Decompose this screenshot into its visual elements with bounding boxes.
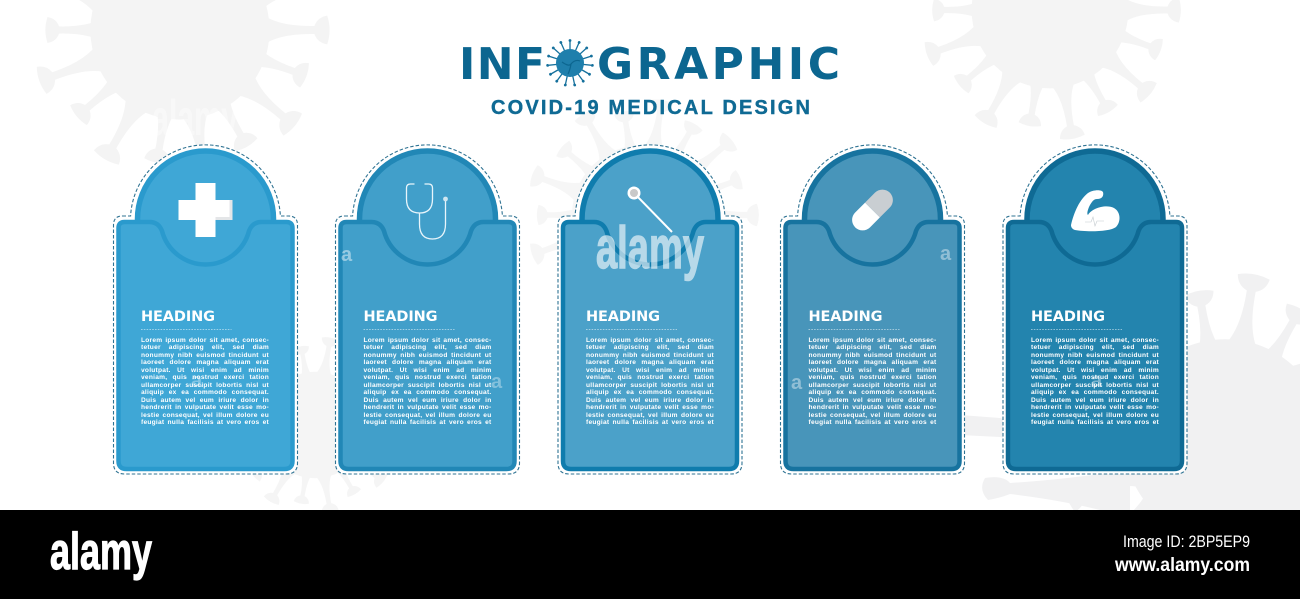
- body text: aliquip ex ea commodo consequat.: [141, 389, 269, 396]
- heading: HEADING: [808, 309, 882, 325]
- body text: nonummy nibh euismod tincidunt ut: [1031, 352, 1159, 358]
- body text: lestie consequat, vel illum dolore eu: [808, 412, 936, 418]
- dashed outline: [1003, 145, 1187, 474]
- body text: hendrerit in vulputate velit esse mo-: [808, 404, 936, 411]
- body text: laoreet dolore magna aliquam erat: [364, 359, 492, 366]
- background virus: bottom left: [228, 336, 404, 514]
- body text: [364, 336, 494, 428]
- card body: [1008, 222, 1182, 469]
- card body: [340, 222, 514, 469]
- arch: [804, 151, 940, 287]
- body text: volutpat. Ut wisi enim ad minim: [364, 366, 492, 374]
- footer logo: alamy: [50, 523, 152, 581]
- body text: nonummy nibh euismod tincidunt ut: [808, 352, 936, 358]
- dashed outline: [336, 145, 520, 474]
- heading: HEADING: [364, 309, 438, 325]
- footer bar: [0, 510, 1300, 599]
- body text: lestie consequat, vel illum dolore eu: [141, 412, 269, 418]
- body text: Duis autem vel eum iriure dolor in: [808, 396, 936, 404]
- panel: card 1: [114, 145, 298, 474]
- title text: INF: INF: [459, 39, 545, 90]
- body text: aliquip ex ea commodo consequat.: [586, 389, 714, 396]
- body text: feugiat nulla facilisis at vero eros et: [1031, 419, 1159, 426]
- body text: veniam, quis nostrud exerci tation: [141, 374, 269, 381]
- subtitle: COVID-19 MEDICAL DESIGN: [491, 97, 810, 119]
- panel: card 2: [336, 145, 520, 474]
- card body: [786, 222, 960, 469]
- body text: Duis autem vel eum iriure dolor in: [586, 396, 714, 404]
- body text: volutpat. Ut wisi enim ad minim: [1031, 366, 1159, 374]
- icon: stethoscope: [406, 184, 448, 239]
- body text: Duis autem vel eum iriure dolor in: [1031, 396, 1159, 404]
- icon: pill capsule: [848, 185, 897, 235]
- body text: volutpat. Ut wisi enim ad minim: [808, 366, 936, 374]
- body text: volutpat. Ut wisi enim ad minim: [141, 366, 269, 374]
- dashed outline: [780, 145, 964, 474]
- body text: laoreet dolore magna aliquam erat: [808, 359, 936, 366]
- body text: feugiat nulla facilisis at vero eros et: [586, 419, 714, 426]
- website: www.alamy.com: [1114, 555, 1250, 576]
- body text: aliquip ex ea commodo consequat.: [364, 389, 492, 396]
- body text: tetuer adipiscing elit, sed diam: [586, 344, 714, 351]
- background virus: top right: [922, 0, 1181, 142]
- background virus: top left: [33, 0, 330, 180]
- watermark fragments: a: [341, 244, 353, 266]
- body text: Lorem ipsum dolor sit amet, consec-: [141, 336, 269, 344]
- body text: veniam, quis nostrud exerci tation: [1031, 374, 1159, 381]
- background virus: center: [527, 98, 759, 332]
- icon: virus as letter O: [546, 39, 594, 87]
- body text: laoreet dolore magna aliquam erat: [1031, 359, 1159, 366]
- body text: Lorem ipsum dolor sit amet, consec-: [1031, 336, 1159, 344]
- body text: aliquip ex ea commodo consequat.: [1031, 389, 1159, 396]
- body text: Duis autem vel eum iriure dolor in: [141, 396, 269, 404]
- body text: veniam, quis nostrud exerci tation: [808, 374, 936, 381]
- body text: volutpat. Ut wisi enim ad minim: [586, 366, 714, 374]
- body text: tetuer adipiscing elit, sed diam: [141, 344, 269, 351]
- body text: ullamcorper suscipit lobortis nisl ut: [808, 382, 936, 388]
- body text: Lorem ipsum dolor sit amet, consec-: [808, 336, 936, 344]
- image id: Image ID: 2BP5EP9: [1123, 532, 1250, 551]
- dashed outline: [114, 145, 298, 474]
- icon: medical cross: [178, 183, 232, 237]
- body text: hendrerit in vulputate velit esse mo-: [586, 404, 714, 411]
- arch: [582, 151, 718, 287]
- body text: Lorem ipsum dolor sit amet, consec-: [586, 336, 714, 344]
- card body: [563, 222, 737, 469]
- icon: reflex pin: [628, 186, 672, 232]
- body text: ullamcorper suscipit lobortis nisl ut: [364, 382, 492, 388]
- card body: [118, 222, 292, 469]
- body text: hendrerit in vulputate velit esse mo-: [141, 404, 269, 411]
- watermark fragments: a: [1091, 370, 1103, 392]
- title text: GRAPHIC: GRAPHIC: [597, 39, 840, 90]
- heading: HEADING: [586, 309, 660, 325]
- body text: veniam, quis nostrud exerci tation: [364, 374, 492, 381]
- body text: tetuer adipiscing elit, sed diam: [1031, 344, 1159, 351]
- arch: [360, 151, 496, 287]
- body text: Duis autem vel eum iriure dolor in: [364, 396, 492, 404]
- divider: [364, 328, 454, 330]
- watermark fragments: a: [791, 372, 803, 394]
- arch: [138, 151, 274, 287]
- body text: [141, 336, 271, 428]
- body text: [1031, 336, 1161, 428]
- watermark: faint alamy over top-left virus: alamy: [152, 90, 238, 146]
- watermark fragments: a: [191, 370, 203, 392]
- divider: [141, 328, 232, 330]
- body text: hendrerit in vulputate velit esse mo-: [364, 404, 492, 411]
- body text: feugiat nulla facilisis at vero eros et: [808, 419, 936, 426]
- arch: [1027, 151, 1163, 287]
- body text: ullamcorper suscipit lobortis nisl ut: [586, 382, 714, 388]
- watermark fragments: a: [940, 243, 952, 265]
- body text: tetuer adipiscing elit, sed diam: [808, 344, 936, 351]
- divider: [586, 328, 677, 330]
- panel: card 3: [558, 145, 742, 474]
- body text: veniam, quis nostrud exerci tation: [586, 374, 714, 381]
- watermark fragments: a: [491, 371, 503, 393]
- body text: nonummy nibh euismod tincidunt ut: [586, 352, 714, 358]
- watermark: center alamy: alamy: [596, 215, 704, 281]
- body text: tetuer adipiscing elit, sed diam: [364, 344, 492, 351]
- panel: card 5: [1003, 145, 1187, 474]
- body text: Lorem ipsum dolor sit amet, consec-: [364, 336, 492, 344]
- body text: [586, 336, 716, 428]
- body text: lestie consequat, vel illum dolore eu: [364, 412, 492, 418]
- body text: ullamcorper suscipit lobortis nisl ut: [1031, 382, 1159, 388]
- body text: laoreet dolore magna aliquam erat: [141, 359, 269, 366]
- background virus: bottom right: [960, 271, 1300, 599]
- watermark fragments: [191, 243, 1103, 394]
- title: [459, 39, 840, 90]
- body text: hendrerit in vulputate velit esse mo-: [1031, 404, 1159, 411]
- body text: ullamcorper suscipit lobortis nisl ut: [141, 382, 269, 388]
- heading: HEADING: [141, 309, 215, 325]
- body text: lestie consequat, vel illum dolore eu: [586, 412, 714, 418]
- body text: lestie consequat, vel illum dolore eu: [1031, 412, 1159, 418]
- divider: [808, 328, 900, 330]
- body text: feugiat nulla facilisis at vero eros et: [141, 419, 269, 426]
- body text: aliquip ex ea commodo consequat.: [808, 389, 936, 396]
- dashed outline: [558, 145, 742, 474]
- heading: HEADING: [1031, 309, 1105, 325]
- divider: [1031, 328, 1122, 330]
- icon: flexed arm: [1071, 190, 1120, 231]
- panel: card 4: [780, 145, 964, 474]
- body text: [808, 336, 938, 428]
- body text: laoreet dolore magna aliquam erat: [586, 359, 714, 366]
- body text: feugiat nulla facilisis at vero eros et: [364, 419, 492, 426]
- body text: nonummy nibh euismod tincidunt ut: [141, 352, 269, 358]
- body text: nonummy nibh euismod tincidunt ut: [364, 352, 492, 358]
